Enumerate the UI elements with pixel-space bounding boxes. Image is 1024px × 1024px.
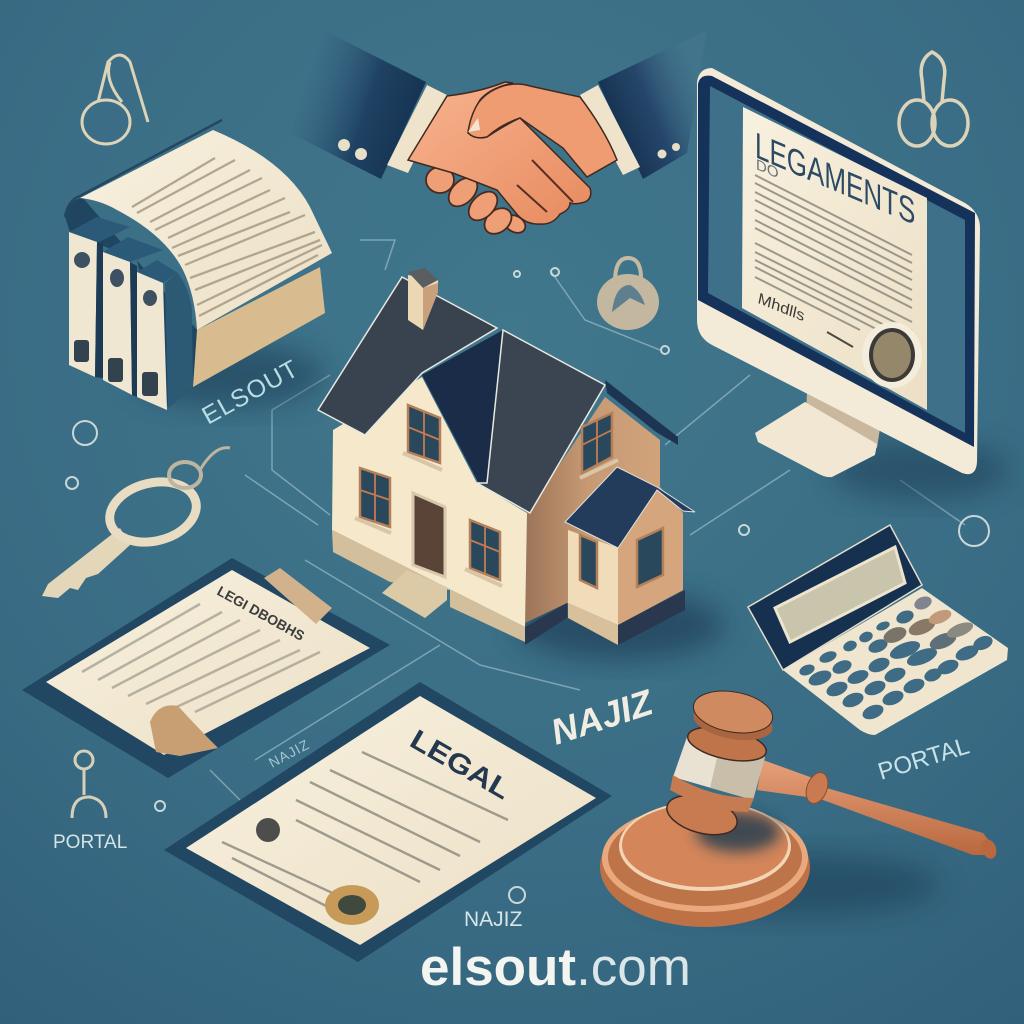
thumb nail and finger creases [468,118,573,212]
right upper hand [468,84,617,177]
stand neck [806,393,880,448]
porch dark plinth [618,590,685,645]
icon: portal pin [72,751,106,818]
document: clipboard legal documents [22,558,390,778]
monitor shadow [830,440,1010,500]
block shadow from head [696,812,780,852]
binder spines [69,217,178,410]
connector lines [210,240,965,800]
porch front wall [568,530,618,625]
label: NAJIZ small: NAJIZ [464,908,523,931]
right roof [477,330,605,513]
teal screen [708,86,965,433]
windows [360,405,612,580]
head white band [673,737,765,800]
shadow under binders [135,343,325,407]
house shadow [515,590,725,660]
window mullions [360,411,612,574]
left roof [318,277,497,435]
house illustration [318,268,725,660]
monitor frame [697,68,980,474]
dark plinth [525,603,567,645]
porch windows [580,528,663,588]
label: PORTAL right: PORTAL [875,732,972,786]
icon: handshake [290,30,707,239]
handle [757,760,990,855]
icon: padlock [597,258,659,330]
label: NAJIZ bold white: NAJIZ [546,681,659,753]
handle collar [802,770,832,806]
dark arch behind binders [65,198,197,408]
left sleeve [290,30,426,179]
document: legal certificate [164,682,612,962]
on-screen document: Mhdlls [758,289,804,326]
lower tan page [193,267,325,387]
left cuff [387,85,447,173]
icon: judge gavel [600,685,999,927]
curved document [65,120,332,330]
icon: rope loop top left [82,55,148,144]
handle end knob [979,837,999,861]
head lower cap [663,788,741,842]
calculator body [783,588,1008,735]
porch plinth [568,603,618,645]
side of last binder [165,273,193,408]
on-screen document: LEGAMENTS [755,125,915,233]
cufflinks [338,139,680,160]
side eave [605,380,678,445]
on-screen document: DO [756,157,778,182]
chimney [408,275,438,330]
icon: computer monitor with legal document [697,68,1010,500]
calculator lid [748,525,922,670]
label: ELSOUT: ELSOUT [197,354,304,430]
right cuff [580,85,640,175]
label: NAJIZ italic faint: NAJIZ [266,736,312,771]
side wall [525,397,683,625]
lower fingers [426,167,529,239]
calculator keys [798,594,995,722]
porch side wall [618,490,683,625]
dark gable triangle [422,330,503,483]
sound block [600,807,810,927]
right sleeve [598,30,707,179]
icon: calculator [748,525,1008,735]
small node dots [66,268,989,903]
dark bezel [698,76,975,447]
front plinth [332,530,525,642]
icon: key with ring [42,448,230,598]
icon: binders with curved document [65,120,332,410]
head lower ring [670,775,754,812]
brand: elsout.com: elsout.com [420,938,691,997]
steps [382,570,447,618]
porch roof [565,467,695,548]
head top cap [691,698,775,746]
sills [355,453,618,586]
document: clipboard legal documents: LEGI DBOBHS [215,583,307,644]
calculator display [775,547,905,642]
head upper ring [685,721,769,767]
stand base [755,402,877,477]
front wall [332,377,527,627]
on-screen document [742,107,927,410]
left main hand [408,82,591,224]
icon: rope loops top right [899,52,968,146]
gavel shadow [640,853,940,917]
label: PORTAL left: PORTAL [53,832,127,853]
document: legal certificate: LEGAL [405,724,515,806]
door [413,493,445,577]
